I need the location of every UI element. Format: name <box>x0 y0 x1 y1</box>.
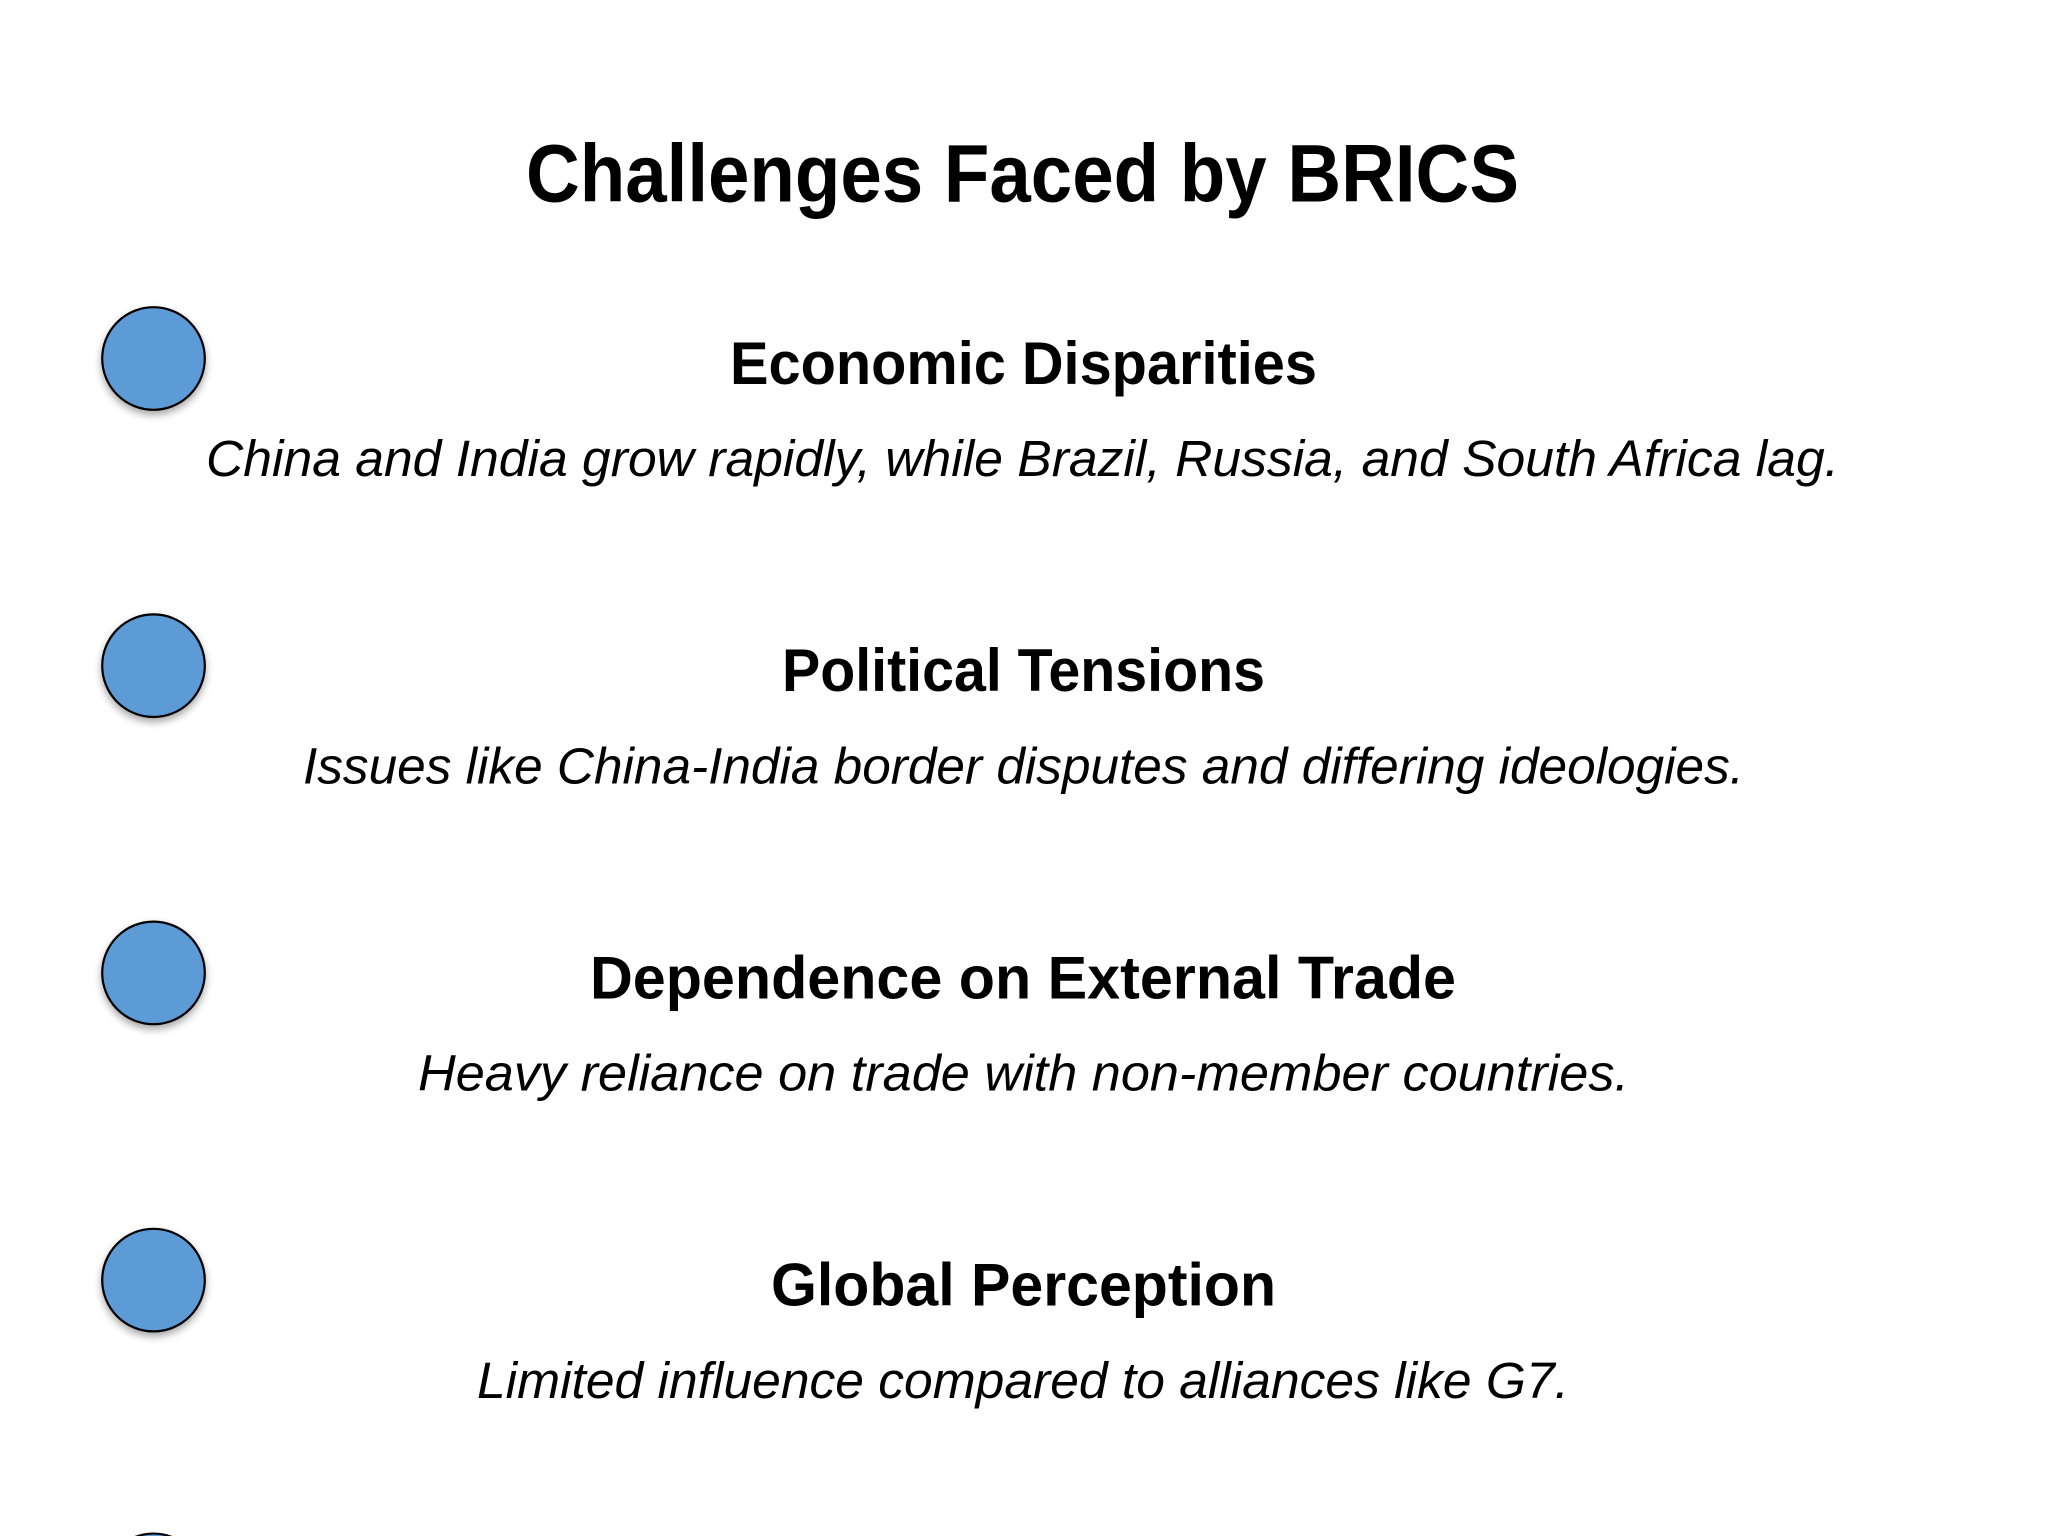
text: political tensions description: Issues like China-India border disputes and differing ideologies. <box>303 737 1744 794</box>
heading: economic disparities: Economic Disparities <box>730 329 1317 397</box>
heading: political tensions: Political Tensions <box>782 636 1265 704</box>
panel: economic disparities <box>102 307 1839 487</box>
icon: bullet circle 1 <box>102 307 205 410</box>
heading: global perception: Global Perception <box>771 1251 1276 1319</box>
text: global perception description: Limited influence compared to alliances like G7. <box>477 1352 1569 1409</box>
icon: bullet circle 5 (cropped at bottom edge) <box>135 1534 172 1536</box>
text: dependence on external trade description: Heavy reliance on trade with non-member countries. <box>418 1045 1629 1102</box>
panel: dependence on external trade <box>102 922 1629 1102</box>
icon: bullet circle 4 <box>102 1229 205 1331</box>
icon: bullet circle 2 <box>102 614 205 717</box>
icon: bullet circle 3 <box>102 922 205 1024</box>
panel: global perception <box>102 1229 1569 1409</box>
panel: political tensions <box>102 614 1744 794</box>
title: Challenges Faced by BRICS <box>526 128 1519 220</box>
heading: dependence on external trade: Dependence on External Trade <box>590 943 1456 1011</box>
text: economic disparities description: China and India grow rapidly, while Brazil, Russia, and South Africa lag. <box>206 430 1839 487</box>
